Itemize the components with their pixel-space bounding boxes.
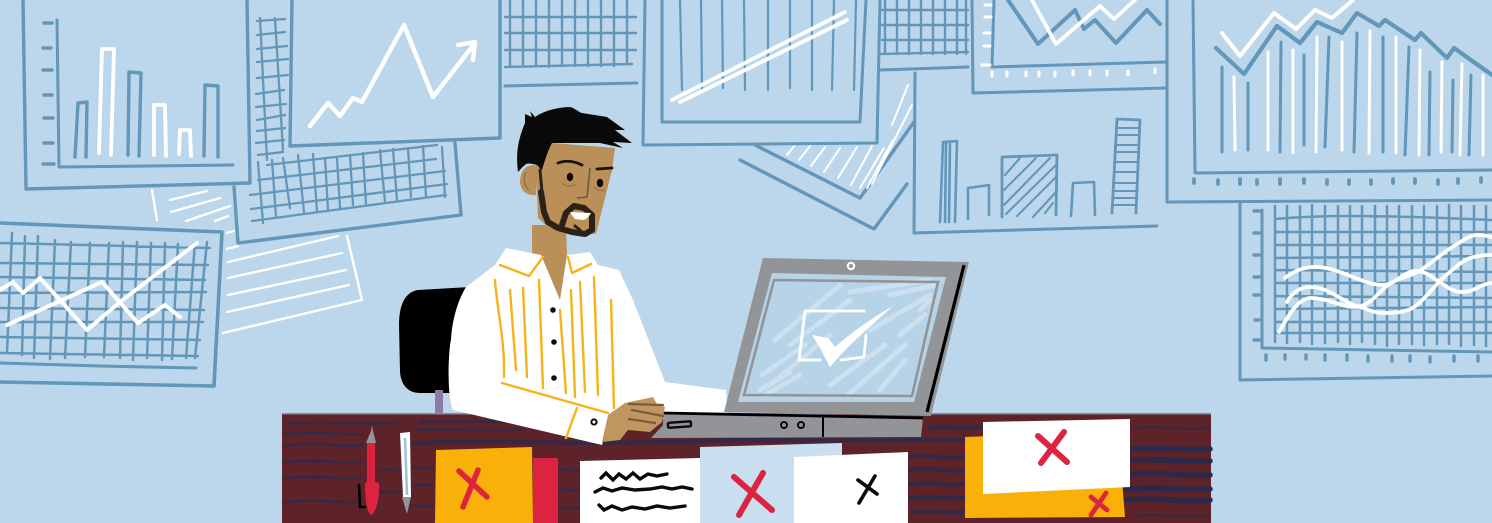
shirt yellow pleats [495, 257, 614, 438]
panel: arrow line chart [290, 0, 500, 146]
white pencil [400, 432, 411, 514]
laptop lid [724, 258, 969, 416]
screen [738, 273, 946, 402]
white sheet with black X [794, 452, 908, 523]
ear [520, 165, 538, 195]
panel: top middle grid [505, 0, 637, 86]
desk [282, 413, 1211, 523]
chair back [399, 287, 470, 393]
figure: man [449, 107, 728, 445]
white note with squiggles [580, 458, 700, 523]
panel: right column and line chart [1167, 0, 1492, 202]
laptop [651, 258, 969, 438]
vertical columns [1222, 31, 1483, 155]
white curves [1285, 267, 1492, 292]
bar chart columns [75, 49, 218, 157]
pale blue sheet with red X [700, 443, 858, 523]
shirt buttons [550, 307, 597, 425]
eyes, brows and nose [524, 161, 612, 198]
right stacked sheets [965, 419, 1130, 518]
face [536, 143, 615, 234]
panel: small grid top right of centre [880, 0, 968, 70]
panel: trend chart top centre [643, 0, 880, 145]
panel: white notes sheet [152, 190, 362, 333]
mouth [570, 212, 591, 220]
screen chalk texture [760, 280, 935, 395]
laptop base [651, 413, 923, 438]
double white trend line [672, 12, 847, 102]
red pen [359, 425, 379, 515]
white trend lines [0, 243, 197, 330]
checkbox icon [799, 306, 893, 367]
panel: five bar chart [914, 73, 1157, 233]
hand [602, 397, 665, 442]
hair [517, 107, 632, 172]
neck [532, 225, 567, 300]
rising arrow line [310, 25, 475, 126]
chair leg [435, 390, 443, 414]
bottom axis dots [1194, 178, 1481, 184]
panel: grid sheet behind arrow chart [234, 18, 461, 243]
webcam [848, 263, 854, 269]
beard [540, 170, 592, 234]
panel: grid chart lower left [0, 223, 222, 386]
panel: triangle sheet [740, 85, 914, 229]
shirt [449, 248, 728, 445]
panel: bar chart top left [23, 0, 250, 189]
yellow folder with red X [435, 447, 558, 523]
panel: grid chart right with curves [1240, 203, 1492, 380]
panel: line chart with white ticks [972, 0, 1166, 93]
column bars [940, 119, 1140, 222]
